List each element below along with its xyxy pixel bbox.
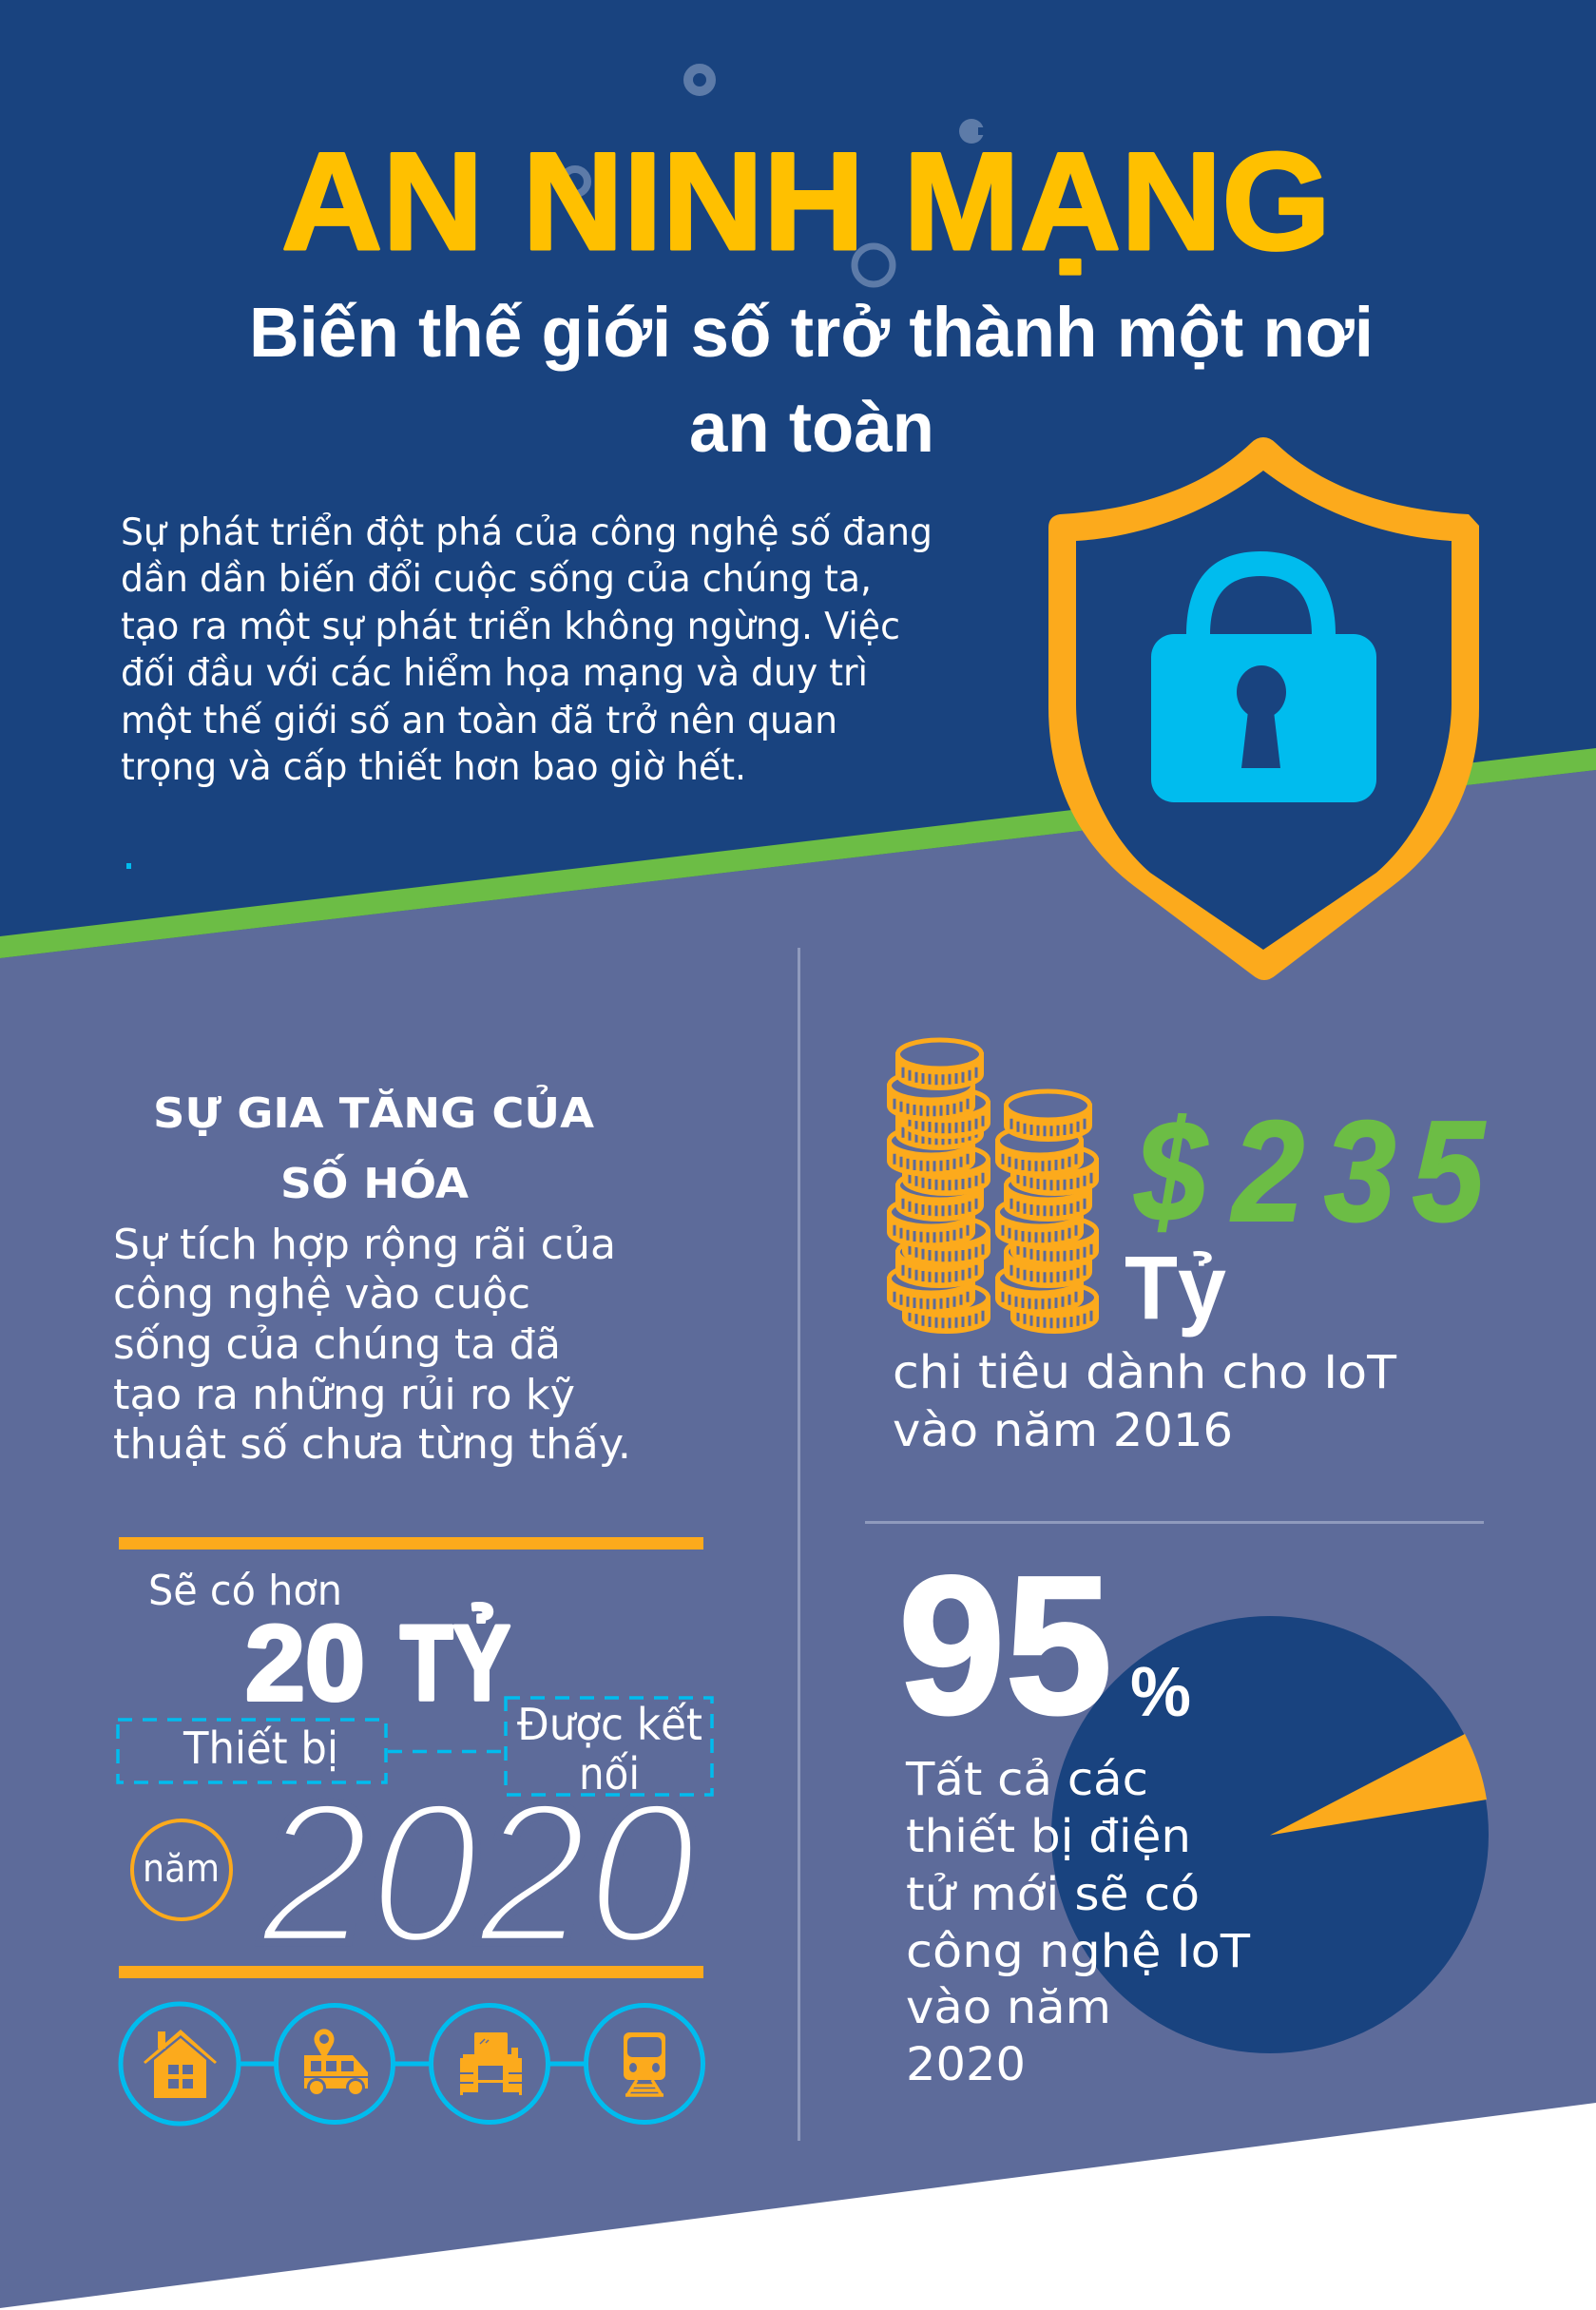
connected icons row (121, 2004, 703, 2124)
subtitle: an toàn (689, 388, 934, 467)
text: new devices: vào năm (906, 1981, 1111, 2034)
stat: 95: 95 (898, 1535, 1112, 1755)
dashed box: connected: Được kết (517, 1699, 702, 1750)
orange rule top (119, 1537, 703, 1550)
green diagonal band (0, 748, 1596, 958)
text: digitization description: tạo ra những rủi ro kỹ (113, 1371, 575, 1419)
subtitle (249, 293, 1374, 467)
dashed connector (388, 1750, 505, 1753)
icon: stacks of coins (889, 1040, 1097, 1332)
panel: lower lavender background (0, 770, 1596, 2308)
dashed box: devices: Thiết bị (183, 1723, 338, 1774)
dashed box: devices (118, 1720, 386, 1782)
badge: year label: năm (143, 1847, 220, 1891)
icon: shield with padlock (1048, 437, 1479, 980)
intro paragraph (121, 511, 933, 789)
heading: digitization (153, 1084, 594, 1208)
dashed box: connected: nối (579, 1748, 640, 1800)
stat: 20 billion (245, 1604, 510, 1723)
text: new devices: 2020 (906, 2038, 1026, 2091)
pie chart: 95 percent (1051, 1616, 1489, 2053)
heading: digitization: SỐ HÓA (280, 1153, 469, 1208)
title: AN NINH MẠNG (281, 124, 1331, 279)
intro paragraph: Sự phát triển đột phá của công nghệ số đang (121, 511, 933, 554)
heading: digitization: SỰ GIA TĂNG CỦA (153, 1084, 594, 1138)
badge: year label (132, 1820, 231, 1919)
text: digitization description: Sự tích hợp rộng rãi của (113, 1221, 616, 1269)
small blue dot (126, 863, 131, 869)
dashed box: connected (506, 1698, 712, 1800)
subtitle: Biến thế giới số trở thành một nơi (249, 293, 1374, 372)
text: new devices (905, 1753, 1251, 2091)
panel: top navy background (0, 0, 1596, 960)
icon: house (144, 2030, 217, 2098)
intro paragraph: dần dần biến đổi cuộc sống của chúng ta, (121, 558, 872, 601)
text: digitization description (113, 1221, 631, 1469)
stat: 235 dollars: $235 (1134, 1091, 1486, 1252)
text: IoT spending (893, 1346, 1397, 1457)
stat: percent sign: % (1130, 1652, 1191, 1731)
text: there will be more than: Sẽ có hơn (148, 1567, 342, 1615)
text: digitization description: công nghệ vào cuộc (113, 1270, 530, 1319)
text: digitization description: sống của chúng ta đã (113, 1320, 561, 1369)
text: new devices: thiết bị điện (906, 1810, 1191, 1863)
stat unit: billion: Tỷ (1125, 1238, 1226, 1338)
intro paragraph: đối đầu với các hiểm họa mạng và duy trì (121, 652, 868, 695)
stat: 20 billion: 20 (245, 1604, 365, 1723)
text: new devices: tử mới sẽ có (906, 1868, 1200, 1921)
orange rule bottom (119, 1966, 703, 1978)
intro paragraph: trọng và cấp thiết hơn bao giờ hết. (121, 746, 746, 789)
decorative gear circles (563, 68, 985, 284)
intro paragraph: tạo ra một sự phát triển không ngừng. Việc (121, 606, 900, 648)
icon: desk with computer (460, 2032, 522, 2095)
vertical divider (798, 948, 800, 2141)
icon: van with location pin (304, 2029, 368, 2097)
text: IoT spending: chi tiêu dành cho IoT (893, 1346, 1397, 1399)
stat: year 2020: 2020 (259, 1761, 696, 1985)
text: new devices: Tất cả các (905, 1753, 1148, 1806)
text: digitization description: thuật số chưa từng thấy. (113, 1420, 631, 1469)
intro paragraph: một thế giới số an toàn đã trở nên quan (121, 700, 837, 742)
horizontal divider (865, 1521, 1484, 1524)
text: new devices: công nghệ IoT (906, 1925, 1251, 1978)
stat: 20 billion: TỶ (400, 1604, 510, 1723)
icon: train (624, 2032, 665, 2095)
text: IoT spending: vào năm 2016 (893, 1404, 1233, 1457)
